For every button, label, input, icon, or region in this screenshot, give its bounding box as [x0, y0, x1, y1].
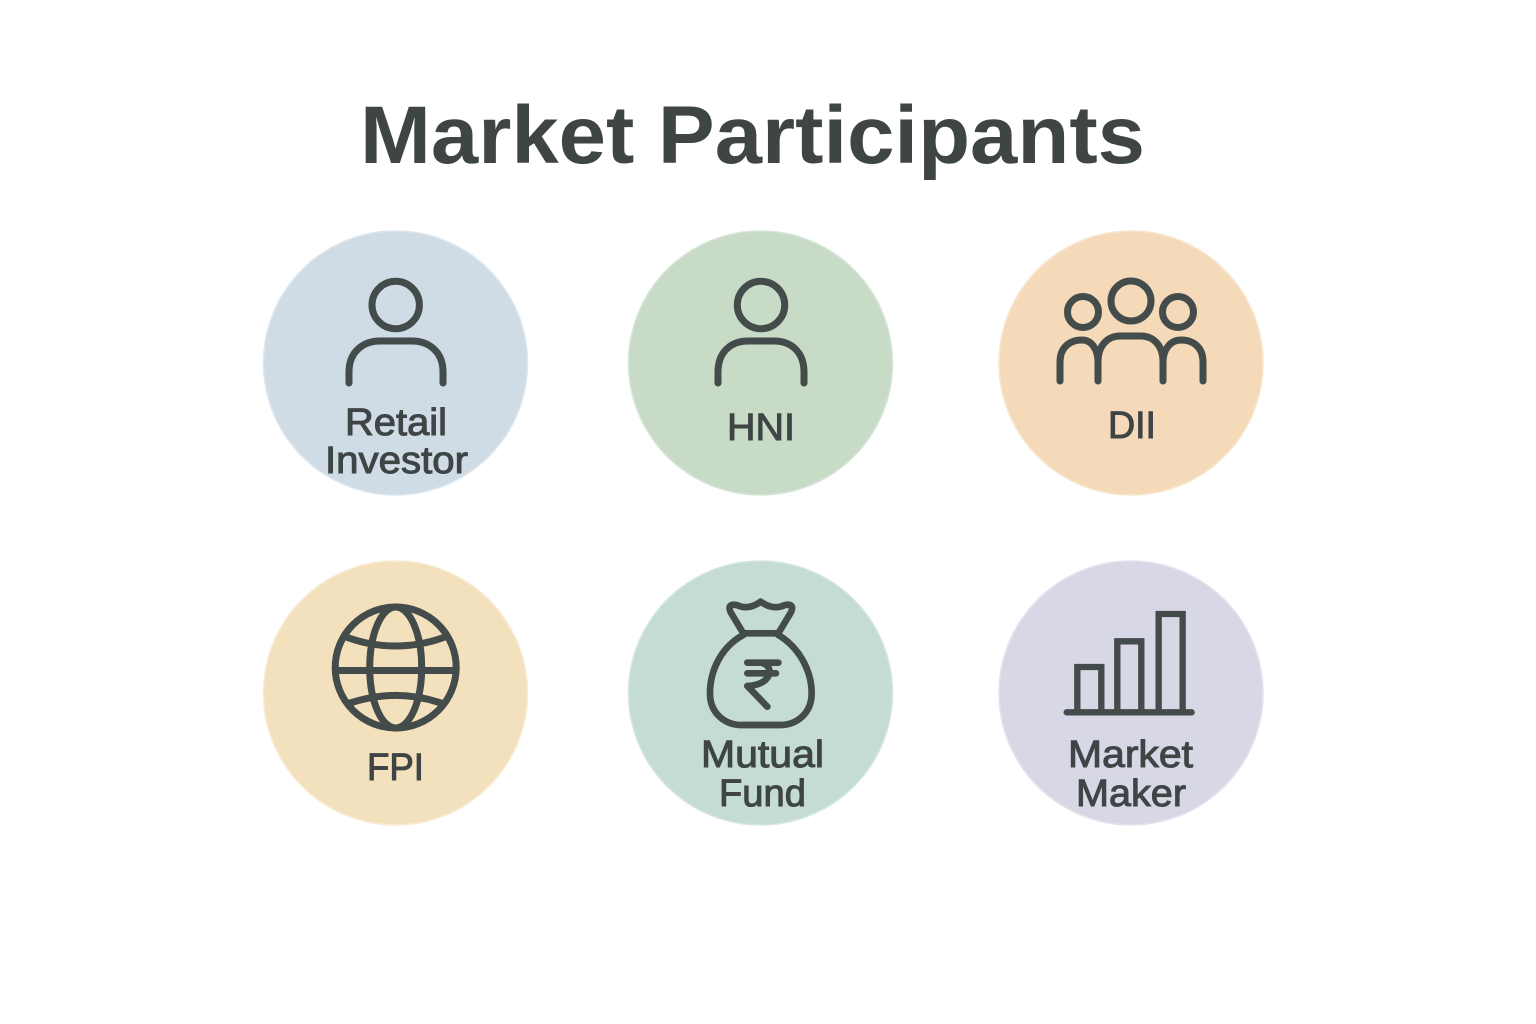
label: Market Maker: Maker	[1076, 773, 1186, 815]
circle: blue background	[264, 231, 528, 495]
title: Market Participants	[360, 90, 1145, 181]
label: Mutual Fund: Fund	[719, 773, 806, 815]
panel: Mutual Fund	[628, 561, 892, 825]
label: Mutual Fund: Mutual	[701, 734, 824, 776]
panel: Market Maker	[999, 561, 1263, 825]
icon: bar chart	[1067, 614, 1192, 712]
circle: orange background	[999, 231, 1263, 495]
label: FPI: FPI	[367, 747, 424, 789]
panel: DII	[999, 231, 1263, 495]
label: Market Maker	[1068, 734, 1193, 815]
label: Mutual Fund	[701, 734, 824, 815]
label: Market Maker: Market	[1068, 734, 1193, 776]
circle: teal background	[628, 561, 892, 825]
label: Retail Investor: Investor	[325, 440, 468, 482]
label: Retail Investor	[325, 402, 468, 482]
circle: yellow background	[264, 561, 528, 825]
circle: lavender background	[999, 561, 1263, 825]
panel: FPI	[264, 561, 528, 825]
label: HNI: HNI	[727, 407, 795, 449]
circle: green background	[628, 231, 892, 495]
icon: money bag with rupee	[710, 602, 812, 725]
icon: globe	[335, 607, 456, 728]
icon: group of people	[1060, 281, 1203, 381]
panel: Retail Investor	[264, 231, 528, 495]
label: DII: DII	[1108, 405, 1156, 447]
icon: person	[718, 281, 804, 383]
label: Retail Investor: Retail	[345, 402, 447, 444]
icon: person	[349, 281, 443, 383]
panel: HNI	[628, 231, 892, 495]
